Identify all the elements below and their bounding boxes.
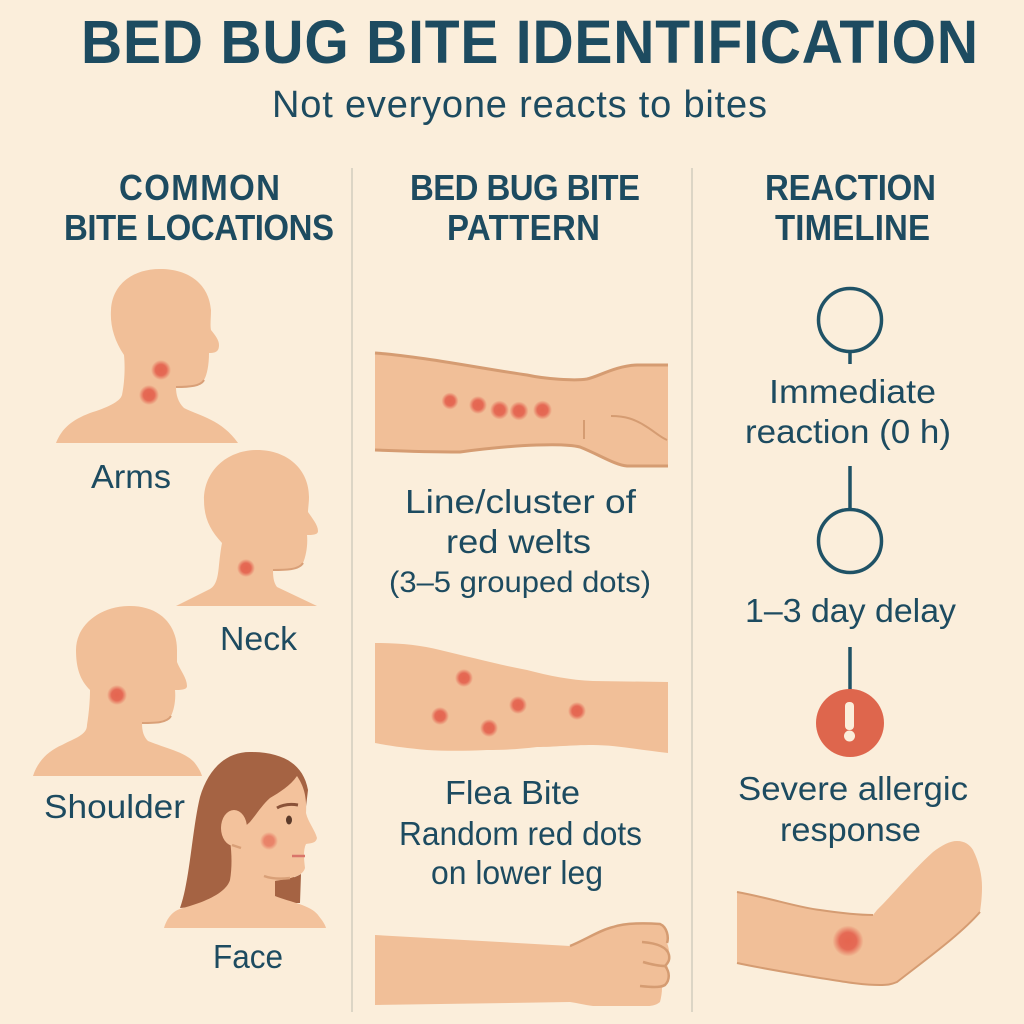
heading: reaction timeline: TIMELINE xyxy=(775,209,930,248)
heading: common bite locations: COMMON xyxy=(119,169,280,208)
text: line or cluster description: Line/cluster of xyxy=(405,483,637,520)
heading: bed bug bite pattern: PATTERN xyxy=(447,209,600,248)
title: BED BUG BITE IDENTIFICATION xyxy=(81,7,978,76)
text: severe allergic response: Severe allergic xyxy=(738,770,968,807)
label: neck: Neck xyxy=(220,620,298,657)
label: face: Face xyxy=(213,938,283,975)
icon: woman's face with bite xyxy=(164,752,326,928)
text: day delay: 1–3 day delay xyxy=(745,592,957,629)
illustration: arm with fist xyxy=(375,923,669,1006)
icon: head with shoulder bite xyxy=(33,606,202,776)
text: immediate reaction xyxy=(745,373,951,450)
text: line or cluster description xyxy=(389,483,651,599)
heading: bed bug bite pattern xyxy=(410,169,640,248)
heading: reaction timeline xyxy=(765,169,936,248)
heading: reaction timeline: REACTION xyxy=(765,169,936,208)
text: flea bite description: Flea Bite xyxy=(445,774,580,811)
text: immediate reaction: reaction (0 h) xyxy=(745,413,951,450)
icon: head with neck bites (arms) xyxy=(56,269,238,443)
icon: alert marker xyxy=(816,647,884,757)
text: flea bite description xyxy=(399,774,642,891)
heading: common bite locations xyxy=(64,169,334,248)
heading: common bite locations: BITE LOCATIONS xyxy=(64,209,334,248)
label: shoulder: Shoulder xyxy=(44,788,185,825)
text: line or cluster description: (3–5 grouped dots) xyxy=(389,566,651,599)
text: immediate reaction: Immediate xyxy=(769,373,936,410)
illustration: lower leg with flea bites xyxy=(375,643,668,753)
illustration: bent arm with welt xyxy=(737,841,982,985)
icon: timeline marker immediate xyxy=(818,288,882,364)
text: flea bite description: on lower leg xyxy=(431,854,603,891)
panel: bed bug bite pattern xyxy=(375,169,669,1006)
illustration: forearm with line of welts xyxy=(375,353,668,466)
panel: common bite locations xyxy=(33,169,334,975)
label: arms: Arms xyxy=(91,458,171,495)
panel: reaction timeline xyxy=(737,169,982,985)
icon: head with neck bite xyxy=(176,450,318,606)
text: line or cluster description: red welts xyxy=(446,523,591,560)
heading: bed bug bite pattern: BED BUG BITE xyxy=(410,169,640,208)
text: flea bite description: Random red dots xyxy=(399,815,642,852)
subtitle: Not everyone reacts to bites xyxy=(272,84,767,126)
icon: timeline marker delay xyxy=(818,466,882,572)
text: severe allergic response xyxy=(738,770,968,848)
text: severe allergic response: response xyxy=(780,811,921,848)
